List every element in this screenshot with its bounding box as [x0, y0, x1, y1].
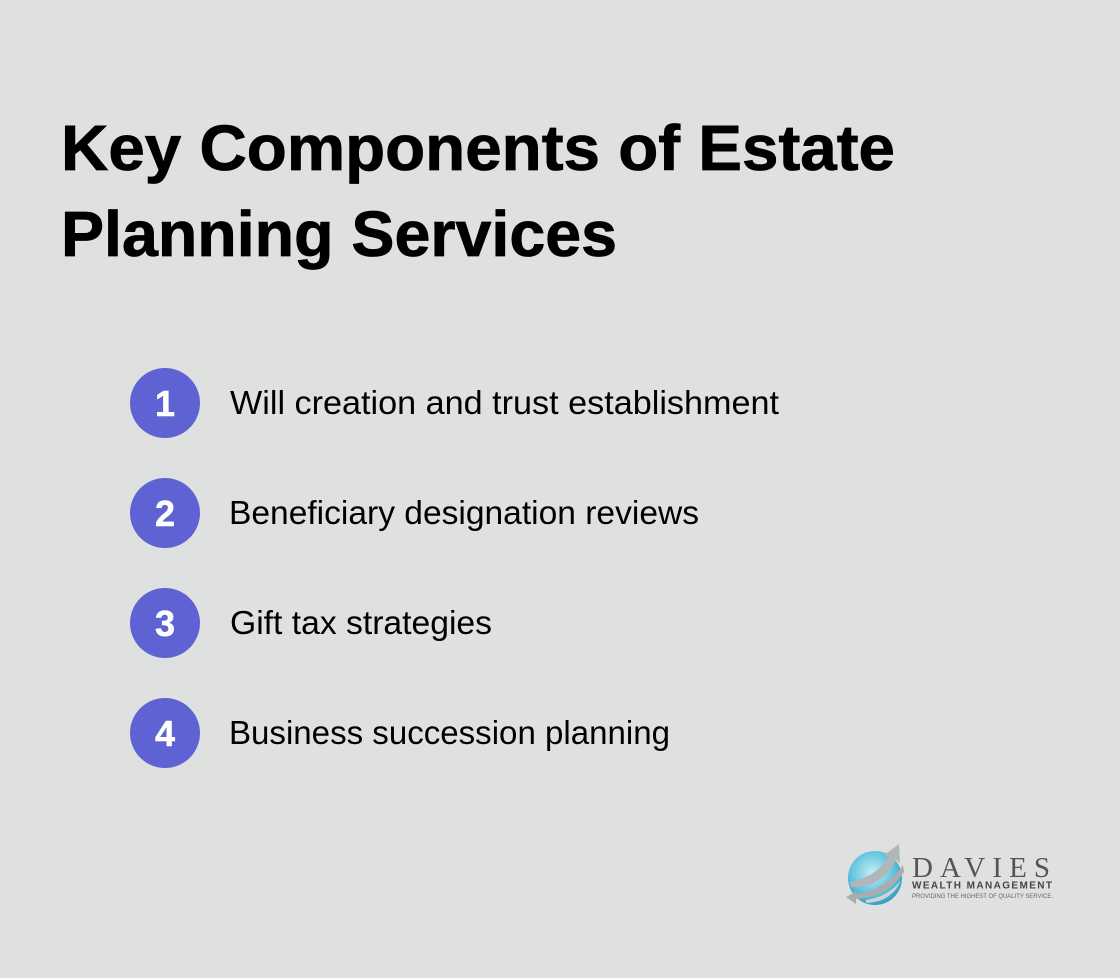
list item 1: 1 — [155, 383, 175, 424]
list item 3 — [130, 588, 492, 658]
list item 2 — [130, 478, 699, 548]
wordmark: DAVIES — [912, 852, 1050, 884]
title: Key Components of Estate — [61, 112, 895, 184]
list item 2: Beneficiary designation reviews — [229, 494, 699, 531]
list item 1 — [130, 368, 779, 438]
list item 1: Will creation and trust establishment — [230, 384, 779, 421]
list item 3: Gift tax strategies — [230, 604, 492, 641]
tagline: PROVIDING THE HIGHEST OF QUALITY SERVICE. — [912, 893, 1053, 900]
icon: globe with arrows — [846, 844, 904, 905]
list item 2: 2 — [155, 493, 175, 534]
title: Planning Services — [61, 198, 617, 270]
title — [61, 112, 895, 270]
list item 4: Business succession planning — [229, 714, 670, 751]
list item 4 — [130, 698, 670, 768]
logo: Davies Wealth Management — [846, 844, 1053, 905]
sub-wordmark: WEALTH MANAGEMENT — [912, 880, 1052, 892]
list item 4: 4 — [155, 713, 175, 754]
list item 3: 3 — [155, 603, 175, 644]
